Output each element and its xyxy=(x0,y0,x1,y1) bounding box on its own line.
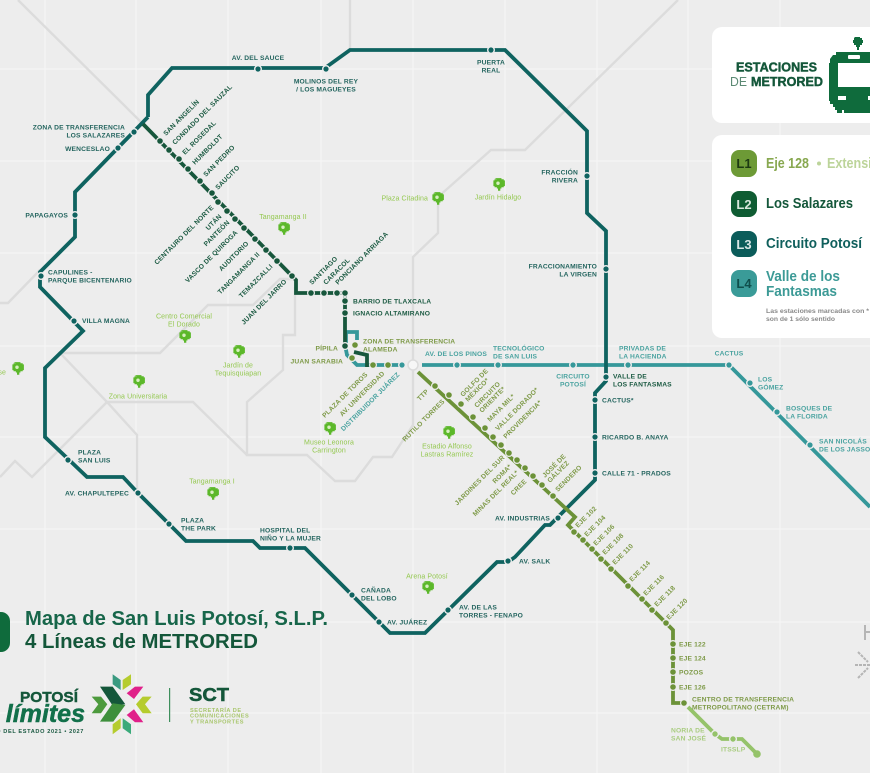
heading: Estaciones de Metrored: ESTACIONES xyxy=(736,60,817,74)
L3 station labels: WENCESLAO xyxy=(65,146,110,153)
L2 station labels: SAUCITO xyxy=(214,164,241,191)
legend: L2: Los Salazares xyxy=(766,196,853,212)
legend: L4 xyxy=(731,269,840,300)
L4 station labels: LA HACIENDA xyxy=(619,354,667,360)
L3 station labels: CAÑADA xyxy=(361,588,391,594)
L2 station labels: CONDADO DEL SAUZAL xyxy=(171,84,234,146)
L3 station labels: CACTUS* xyxy=(602,398,634,404)
map title xyxy=(0,608,328,653)
L1 station labels: PÍPILA xyxy=(315,344,338,352)
place: Plaza Citadina xyxy=(381,192,444,205)
L4 station labels: GÓMEZ xyxy=(758,382,783,392)
L4 station labels: PRIVADAS DE xyxy=(619,346,666,352)
logo: SCT: SCT xyxy=(189,685,229,705)
L4 station labels: DISTRIBUIDOR JUÁREZ xyxy=(339,370,401,433)
L2 station labels: SANTIAGO xyxy=(308,256,339,286)
L1 station labels: ZONA DE TRANSFERENCIA xyxy=(363,338,455,346)
L2 stations xyxy=(157,138,348,349)
place: Arena Potosí: Arena Potosí xyxy=(406,574,448,580)
street network xyxy=(0,0,678,490)
L2 station labels: BARRIO DE TLAXCALA xyxy=(353,298,431,306)
L1 station labels: METROPOLITANO (CETRAM) xyxy=(692,704,789,712)
line L2 Los Salazares xyxy=(143,124,367,367)
place: Jardín de Tequisquiapan: Tequisquiapan xyxy=(215,370,261,378)
L1 station labels: RUTILO TORRES xyxy=(401,398,447,443)
L4 station labels: AV. DE LOS PINOS xyxy=(425,351,487,358)
L1 station labels: PROVIDENCIA* xyxy=(502,399,544,440)
L1 station labels: EJE 110 xyxy=(611,543,635,566)
panel: title card xyxy=(712,27,870,123)
place: Plaza Citadina: Plaza Citadina xyxy=(381,196,428,202)
place: Centro Comercial El Dorado xyxy=(156,314,212,343)
compass mark xyxy=(855,625,870,678)
panel: line legend xyxy=(712,135,870,338)
L1 station labels: MÉXICO* xyxy=(463,376,491,403)
L2 station labels: EL ROSEDAL xyxy=(181,120,218,156)
L2 station labels: UTÁN xyxy=(203,212,223,232)
title badge xyxy=(0,612,10,652)
L1 station labels: MAYA MIL* xyxy=(486,393,517,423)
L2 station labels: TANGAMANGA II xyxy=(217,251,261,296)
L1 station labels: EJE 124 xyxy=(679,656,706,662)
place: Jardín de Tequisquiapan xyxy=(215,345,261,378)
place: Arena Potosí xyxy=(406,574,448,594)
L1 station labels: CIRCUITO xyxy=(473,381,502,409)
logo: SCT: Y TRANSPORTES xyxy=(190,719,244,725)
L4 station labels: LOS FANTASMAS xyxy=(613,382,672,388)
legend: L4: Valle de los xyxy=(766,269,840,285)
L1 station labels: GÁLVEZ xyxy=(545,459,571,484)
L3 station labels: PUERTA xyxy=(477,60,505,66)
L1 station labels: EJE 122 xyxy=(679,642,706,648)
line L1 Eje 128 xyxy=(349,342,687,706)
L1 station labels: EJE 118 xyxy=(653,585,677,608)
L3 station labels: LA VIRGEN xyxy=(559,272,597,278)
L2 station labels: TEMAZCALLI xyxy=(238,263,274,300)
L2 station labels: PONCIANO ARRIAGA xyxy=(334,231,390,286)
legend: L1: L1 xyxy=(736,156,752,171)
logo: star emblem xyxy=(92,674,152,734)
logo divider xyxy=(169,688,170,722)
L1 station labels: JARDINES DEL SUR xyxy=(454,454,506,507)
legend: L3: Circuito Potosí xyxy=(766,236,863,252)
L2 station labels: IGNACIO ALTAMIRANO xyxy=(353,310,430,318)
heading: Estaciones de Metrored xyxy=(730,60,823,89)
L3 station labels: THE PARK xyxy=(181,526,216,532)
L3 station labels xyxy=(25,55,671,626)
L1 station labels: CREE xyxy=(510,478,529,497)
L1 station labels: CENTRO DE TRANSFERENCIA xyxy=(692,696,794,704)
place: Tangamanga I: Tangamanga I xyxy=(189,478,235,486)
place: Museo Leonora Carrington: Carrington xyxy=(312,448,346,454)
logo: SCT: SECRETARÍA DE xyxy=(190,708,242,714)
L3 station labels: AV. JUÁREZ xyxy=(387,618,427,626)
L1 station labels: MINAS DEL REAL* xyxy=(472,469,521,518)
L2 station labels: JUAN DEL JARRO xyxy=(240,278,288,326)
logo: SCT xyxy=(189,685,249,725)
L3 stations xyxy=(38,47,609,625)
L4 stations xyxy=(399,362,813,448)
L2 station labels: PANTEÓN xyxy=(201,218,231,248)
L1 station labels: EJE 102 xyxy=(574,505,598,529)
place: Jardín Hidalgo: Jardín Hidalgo xyxy=(475,194,521,202)
L3 station labels: DEL LOBO xyxy=(361,596,397,602)
L3 station labels: FRACCIÓN xyxy=(541,170,578,176)
legend: L1: Eje 128 xyxy=(766,156,809,172)
L2 station labels: SAN PEDRO xyxy=(202,144,237,178)
place: partial left xyxy=(0,362,24,376)
park icons and place names xyxy=(0,178,521,594)
L2 station labels: HUMBOLDT xyxy=(191,133,225,166)
L1 station labels: AV. UNIVERSIDAD xyxy=(339,370,386,418)
L1 station labels: JOSÉ DE xyxy=(540,451,568,479)
legend note xyxy=(766,309,870,323)
L4 station labels: POTOSÍ xyxy=(560,380,586,388)
L4 station labels: DE SAN LUIS xyxy=(493,354,537,360)
L3 station labels: AV. INDUSTRIAS xyxy=(495,516,550,522)
logo: Potosí sin límites xyxy=(0,689,85,735)
place: Museo Leonora Carrington: Museo Leonora xyxy=(304,440,354,446)
L3 station labels: PAPAGAYOS xyxy=(25,212,68,220)
L2 station labels xyxy=(153,84,431,326)
L4 station labels: TECNOLÓGICO xyxy=(493,346,545,352)
L3 station labels: AV. CHAPULTEPEC xyxy=(65,490,129,498)
L3 station labels: FRACCIONAMIENTO xyxy=(529,264,597,270)
L3 station labels: AV. SALK xyxy=(519,558,550,566)
L3 station labels: TORRES - FENAPO xyxy=(459,612,523,620)
L1 station labels: SAN JOSÉ xyxy=(671,734,706,742)
L4 station labels: BOSQUES DE xyxy=(786,406,832,412)
L4 station labels: LA FLORIDA xyxy=(786,414,828,420)
L3 station labels: AV. DE LAS xyxy=(459,604,497,612)
L3 station labels: NIÑO Y LA MUJER xyxy=(260,534,321,542)
heading: Estaciones de Metrored: DE xyxy=(730,74,747,89)
L1 station labels: TTP xyxy=(416,388,431,403)
L4 station labels: SAN NICOLÁS xyxy=(819,438,867,446)
L4 station labels: CACTUS xyxy=(715,350,744,358)
transfer junction xyxy=(408,360,418,370)
L3 station labels: VILLA MAGNA xyxy=(82,318,130,325)
place: Centro Comercial El Dorado: El Dorado xyxy=(168,322,200,328)
place: Estadio Alfonso Lastras Ramírez xyxy=(421,426,474,458)
L1 station labels: NORIA DE xyxy=(671,728,705,734)
legend: L3: L3 xyxy=(736,237,752,252)
legend: L4: Fantasmas xyxy=(766,284,837,300)
L3 station labels: HOSPITAL DEL xyxy=(260,528,310,534)
L3 station labels: RIVERA xyxy=(552,178,578,184)
L2 station labels: VASCO DE QUIROGA xyxy=(184,229,239,284)
place: Tangamanga II xyxy=(259,214,307,235)
legend: L3 xyxy=(731,231,863,257)
L2 station labels: CARACOL xyxy=(322,257,352,286)
L3 station labels: REAL xyxy=(482,68,500,74)
L1 station labels: EJE 106 xyxy=(592,523,616,547)
legend note: Las estaciones marcadas con * xyxy=(766,309,870,315)
L1 stations xyxy=(349,342,687,706)
L3 station labels: AV. DEL SAUCE xyxy=(232,55,285,62)
legend: L2: L2 xyxy=(736,197,752,212)
line L4 Valle de los Fantasmas xyxy=(345,332,870,507)
L3 station labels: CAPULINES - xyxy=(48,270,92,276)
heading: Estaciones de Metrored: METRORED xyxy=(751,74,823,89)
icon: bus xyxy=(829,37,870,113)
L3 station labels: PLAZA xyxy=(181,518,204,524)
L1 station labels: GOLFO DE xyxy=(459,368,490,398)
logo: Potosí sin límites: POTOSÍ xyxy=(20,689,79,706)
L1 station labels: EJE 114 xyxy=(628,560,652,583)
legend: L2 xyxy=(731,191,853,217)
place: Tangamanga I xyxy=(189,478,235,500)
L1 station labels: EJE 104 xyxy=(583,514,607,538)
L1 station labels: POZOS xyxy=(679,670,704,676)
L3 station labels: SAN LUIS xyxy=(78,458,111,464)
L4 station labels: VALLE DE xyxy=(613,374,647,380)
place: Tangamanga II: Tangamanga II xyxy=(259,214,307,221)
L1 station labels: PLAZA DE TOROS xyxy=(321,371,370,420)
place: Zona Universitaria: Zona Universitaria xyxy=(109,394,167,400)
L2 station labels: SAN ANGELÍN xyxy=(161,97,201,137)
place: Jardín Hidalgo xyxy=(475,178,521,202)
L1 station labels: ORIENTE* xyxy=(478,386,507,414)
L1 station labels: VALLE DORADO* xyxy=(494,387,540,432)
L4 station labels: LOS xyxy=(758,376,772,384)
place: Estadio Alfonso Lastras Ramírez: Estadio Alfonso xyxy=(422,444,472,450)
L3 station labels: / LOS MAGUEYES xyxy=(296,86,356,94)
L4 station labels: CIRCUITO xyxy=(556,374,590,380)
place: Estadio Alfonso Lastras Ramírez: Lastras Ramírez xyxy=(421,452,474,458)
logo: SCT: COMUNICACIONES xyxy=(190,714,249,720)
L4 station labels xyxy=(339,344,870,454)
L2 station labels: AUDITORIO xyxy=(218,240,250,273)
place: Centro Comercial El Dorado: Centro Comercial xyxy=(156,314,212,320)
legend note: son de 1 sólo sentido xyxy=(766,317,835,323)
L3 station labels: PARQUE BICENTENARIO xyxy=(48,278,132,284)
L3 station labels: PLAZA xyxy=(78,450,101,456)
L1 extension xyxy=(688,707,761,758)
L1 station labels: EJE 116 xyxy=(642,574,666,597)
L1 station labels: EJE 120 xyxy=(665,597,689,621)
L4 station labels: DE LOS JASSO xyxy=(819,446,870,454)
L1 station labels: EJE 108 xyxy=(601,532,625,556)
place: Museo Leonora Carrington xyxy=(304,422,354,454)
L1 station labels: EJE 126 xyxy=(679,684,706,692)
map title: 4 Líneas de METRORED xyxy=(25,631,258,653)
L1 station labels: ITSSLP xyxy=(721,746,746,754)
L3 station labels: CALLE 71 - PRADOS xyxy=(602,470,671,478)
line L3 Circuito Potosí xyxy=(38,47,609,633)
L1 station labels: ROMA* xyxy=(492,463,514,485)
legend: L4: L4 xyxy=(736,276,752,291)
L1 station labels: SENDERO xyxy=(554,464,584,493)
place: Zona Universitaria xyxy=(109,375,167,400)
map title: Mapa de San Luis Potosí, S.L.P. xyxy=(25,608,328,630)
place: Jardín de Tequisquiapan: Jardín de xyxy=(223,362,253,370)
L3 station labels: MOLINOS DEL REY xyxy=(294,78,358,86)
L1 station labels: ALAMEDA xyxy=(363,346,398,354)
L3 station labels: ZONA DE TRANSFERENCIA xyxy=(33,124,125,132)
L2 station labels: CENTAURO DEL NORTE xyxy=(153,204,216,266)
L3 station labels: RICARDO B. ANAYA xyxy=(602,434,668,442)
L3 station labels: LOS SALAZARES xyxy=(66,132,125,140)
L1 station labels xyxy=(291,338,794,754)
L1 station labels: JUAN SARABIA xyxy=(291,358,343,366)
legend: L1 xyxy=(731,150,870,177)
